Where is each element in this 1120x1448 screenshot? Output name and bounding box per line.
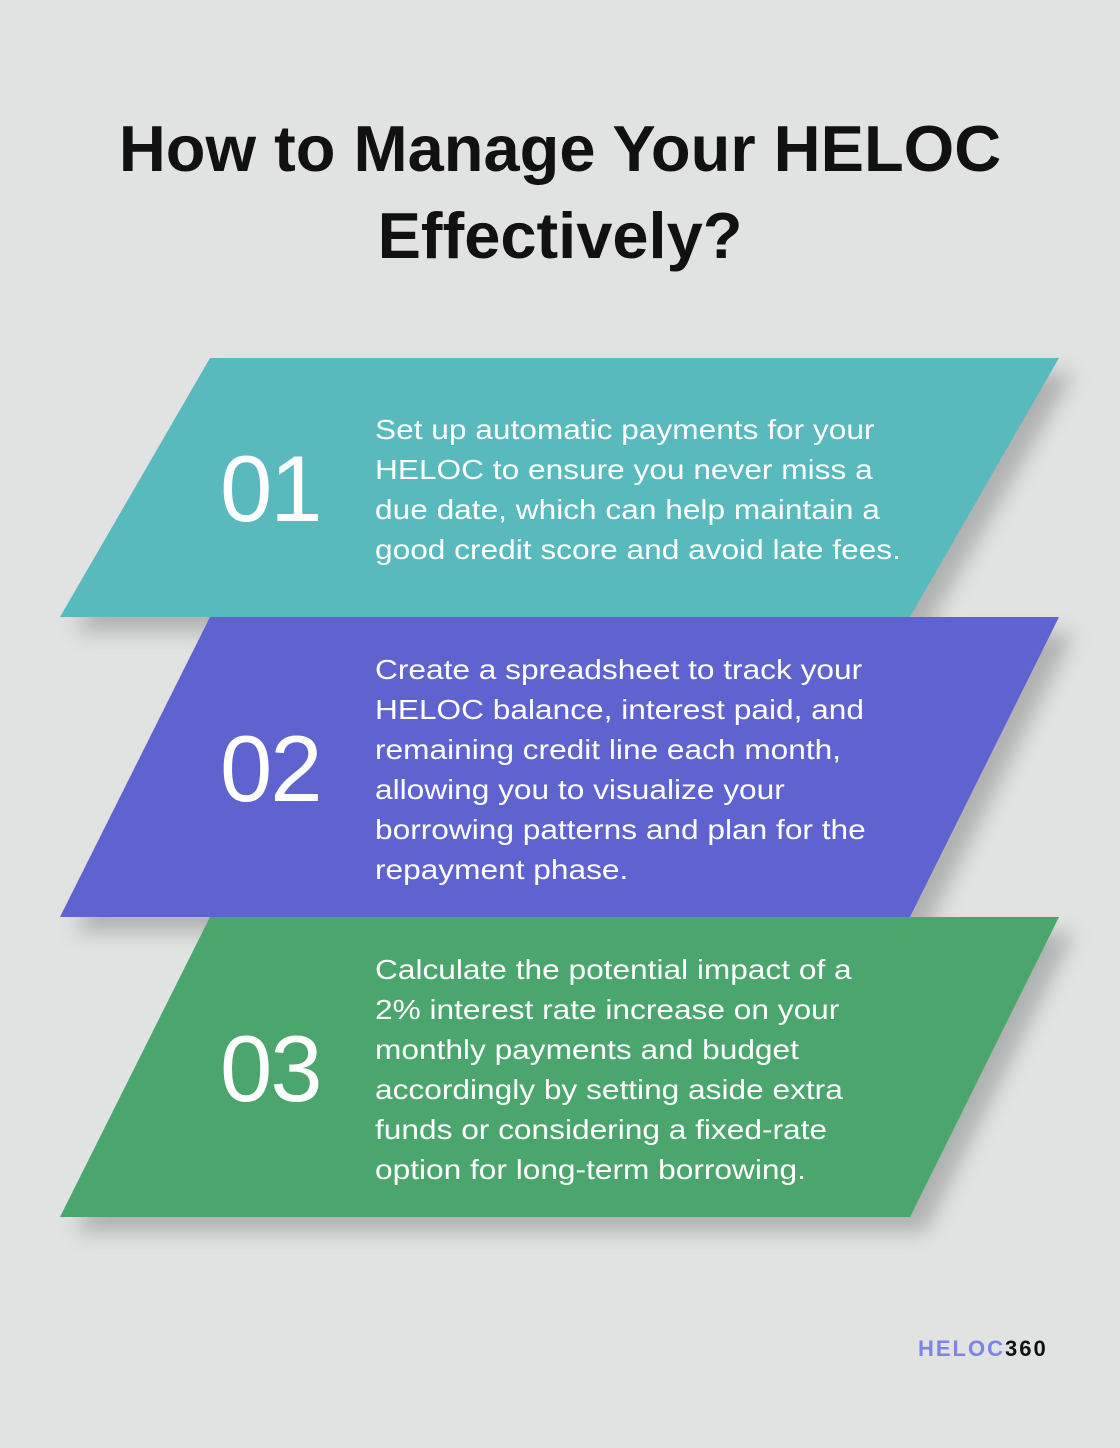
panel 1 text: due date, which can help maintain a: [375, 494, 880, 525]
panel 1 text: [375, 414, 901, 565]
panel 2 text: remaining credit line each month,: [375, 734, 841, 765]
panel 2 text: allowing you to visualize your: [375, 774, 785, 805]
panel 3 text: monthly payments and budget: [375, 1034, 799, 1065]
panel 3 number: 03: [220, 1016, 321, 1121]
title: How to Manage Your HELOC: [119, 112, 1001, 185]
panel 3 text: option for long-term borrowing.: [375, 1154, 806, 1185]
panel 3 text: Calculate the potential impact of a: [375, 954, 852, 985]
panel 3 text: funds or considering a fixed-rate: [375, 1114, 827, 1145]
title: [119, 112, 1001, 272]
title: Effectively?: [378, 199, 742, 272]
panel 2 text: [375, 654, 866, 885]
panel 2 text: repayment phase.: [375, 854, 628, 885]
panel 2 text: Create a spreadsheet to track your: [375, 654, 862, 685]
panel 2 text: borrowing patterns and plan for the: [375, 814, 866, 845]
panel 2 text: HELOC balance, interest paid, and: [375, 694, 864, 725]
panel 3 text: [375, 954, 852, 1185]
panel 3 text: accordingly by setting aside extra: [375, 1074, 843, 1105]
panel 1 text: Set up automatic payments for your: [375, 414, 874, 445]
panel 3 text: 2% interest rate increase on your: [375, 994, 839, 1025]
logo: HELOC360: [918, 1336, 1048, 1361]
panel 1 number: 01: [220, 436, 321, 541]
panel 1 text: HELOC to ensure you never miss a: [375, 454, 873, 485]
panel 1 text: good credit score and avoid late fees.: [375, 534, 901, 565]
panel 2 number: 02: [220, 716, 321, 821]
